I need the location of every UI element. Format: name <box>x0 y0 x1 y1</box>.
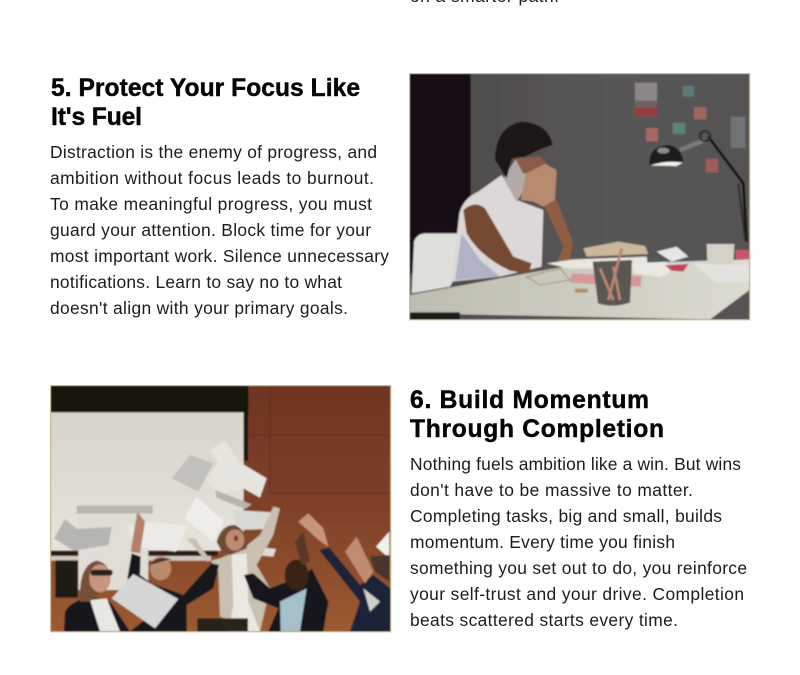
man at right with raised arms <box>298 513 390 631</box>
text block: section 5 body: To make meaningful progress, you must <box>50 194 372 214</box>
text block: section 6 body <box>410 454 747 630</box>
heading: section 5: 5. Protect Your Focus Like <box>51 75 360 102</box>
woman with glasses <box>64 561 130 631</box>
heading: section 5 <box>51 75 360 131</box>
photo: stressed woman at desk <box>409 73 750 320</box>
heading: section 6: Through Completion <box>410 416 664 443</box>
desk <box>410 259 749 319</box>
flipchart <box>55 506 153 598</box>
laptop <box>197 618 248 631</box>
text block: section 5 body <box>50 142 389 318</box>
wall notes <box>635 83 745 173</box>
text block: section 5 body: ambition without focus leads to burnout. <box>50 168 374 188</box>
chair <box>412 233 458 293</box>
text block: section 6 body: momentum. Every time you finish <box>410 532 675 552</box>
text block: section 6 body: don't have to be massive to matter. <box>410 480 693 500</box>
text block: section 5 body: doesn't align with your primary goals. <box>50 298 348 318</box>
text block: section 6 body: your self-trust and your drive. Completion <box>410 584 744 604</box>
woman in beige <box>187 507 280 631</box>
heading: section 6 <box>410 387 664 443</box>
flying papers <box>54 441 389 558</box>
paper in front <box>112 574 178 628</box>
woman <box>452 122 573 282</box>
text block: section 6 body: Nothing fuels ambition like a win. But wins <box>410 454 741 474</box>
text block: section 6 body: Completing tasks, big and small, builds <box>410 506 722 526</box>
heading: section 5: It's Fuel <box>51 104 142 131</box>
text block: section 5 body: Distraction is the enemy of progress, and <box>50 142 377 162</box>
man in navy <box>244 532 328 631</box>
photo: team throwing papers <box>50 385 391 632</box>
text block: section 5 body: guard your attention. Block time for your <box>50 220 371 240</box>
text block: section 5 body: most important work. Silence unnecessary <box>50 246 389 266</box>
lamp <box>649 131 747 242</box>
text block: section 6 body: beats scattered starts every time. <box>410 610 678 630</box>
text block: section 6 body: something you set out to do, you reinforce <box>410 558 747 578</box>
man in black with raised arms <box>127 512 219 631</box>
heading: section 6: 6. Build Momentum <box>410 387 649 414</box>
text block: section 5 body: notifications. Learn to say no to what <box>50 272 342 292</box>
desk items <box>527 242 749 306</box>
